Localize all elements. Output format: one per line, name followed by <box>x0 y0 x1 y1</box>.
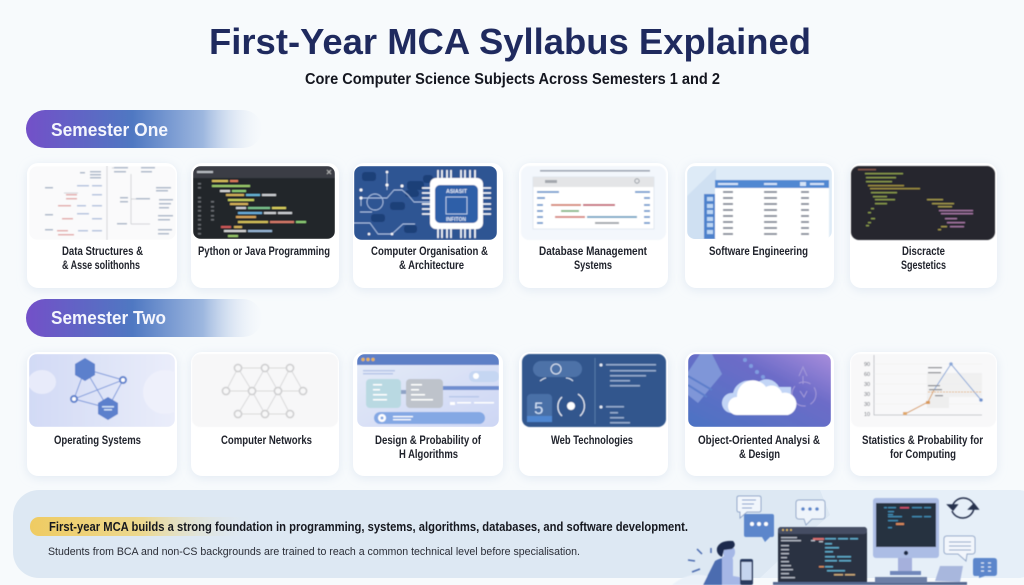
panel: object-oriented analysis card <box>685 352 834 476</box>
chart: line chart: 30 <box>864 402 870 408</box>
label: Discracte <box>902 246 945 258</box>
panel: design and algorithms card <box>353 352 503 476</box>
panel: computer networks card <box>191 352 339 476</box>
thumbnail: network mesh <box>192 354 338 427</box>
label: Computer Networks <box>221 435 312 447</box>
panel: discrete card: Sgestetics <box>901 260 946 272</box>
thumbnail: data table <box>687 166 832 240</box>
chart: line chart: 30 <box>864 382 870 388</box>
label: Object-Oriented Analysi & <box>698 435 820 447</box>
panel: data structures card <box>27 163 177 288</box>
thumbnail: cpu chip: INFITON <box>446 217 466 223</box>
chart: line chart: 60 <box>864 372 870 378</box>
thumbnail: dark code <box>851 166 995 240</box>
panel: python or java card <box>191 163 339 288</box>
thumbnail: tree diagram <box>44 166 174 240</box>
icon: blue list bubble <box>973 558 997 578</box>
panel: object-oriented analysis card: & Design <box>739 449 780 461</box>
icon: note bubble <box>944 536 975 561</box>
heading: semester one: Semester One <box>51 119 168 140</box>
chart: line chart: 30 <box>864 392 870 398</box>
panel: summary banner <box>13 490 1024 578</box>
panel: design and algorithms card: H Algorithms <box>399 449 458 461</box>
chart: line chart: 90 <box>864 362 870 368</box>
icon: laptop code screen <box>778 527 867 585</box>
panel: statistics card: for Computing <box>890 449 956 461</box>
title: First-Year MCA Syllabus Explained <box>209 21 811 62</box>
thumbnail: sql query window <box>521 166 666 240</box>
label: Python or Java Programming <box>198 246 330 258</box>
label: Operating Systems <box>54 435 141 447</box>
thumbnail: process graph <box>28 354 187 427</box>
label: Database Management <box>539 246 647 258</box>
label: Computer Organisation & <box>371 246 488 258</box>
panel: statistics card <box>850 352 997 476</box>
heading: semester two: Semester Two <box>51 307 166 328</box>
highlight <box>30 517 255 536</box>
icon: person with phone <box>672 541 753 585</box>
subtitle: Core Computer Science Subjects Across Semesters 1 and 2 <box>305 71 720 88</box>
icon: small laptop <box>935 566 963 582</box>
label: Web Technologies <box>551 435 633 447</box>
panel: web technologies card <box>519 352 668 476</box>
illustration: developer workspace <box>672 496 997 585</box>
thumbnail: web dashboard: 5 <box>534 399 543 418</box>
panel: discrete card <box>850 163 997 288</box>
thumbnail: cpu chip: ASIASIT <box>446 189 467 195</box>
chart: line chart <box>851 354 996 427</box>
panel: database management card <box>519 163 668 288</box>
desk <box>773 582 967 585</box>
thumbnail: cloud illustration <box>688 354 831 427</box>
panel: database management card: Systems <box>574 260 612 272</box>
icon: white chat bubble <box>796 500 825 525</box>
heading: semester two <box>26 299 262 337</box>
label: Data Structures & <box>62 246 143 258</box>
key message: First-year MCA builds a strong foundation in programming, systems, algorithms, databases, and software development. <box>49 519 688 534</box>
thumbnail: web dashboard <box>522 354 666 427</box>
panel: computer organisation card <box>353 163 503 288</box>
chart: line chart: 10 <box>864 412 870 418</box>
icon: blue chat bubble <box>744 514 774 542</box>
icon: white note bubble <box>737 496 761 518</box>
thumbnail: code editor <box>193 166 335 239</box>
label: Software Engineering <box>709 246 808 258</box>
heading: semester one <box>26 110 262 148</box>
supporting text: Students from BCA and non-CS backgrounds are trained to reach a common technical level before specialisation. <box>48 546 580 558</box>
panel: computer organisation card: & Architecture <box>399 260 464 272</box>
icon: refresh arrows <box>948 498 978 518</box>
thumbnail: cpu chip <box>354 166 497 240</box>
panel: data structures card: & Asse solithonhs <box>62 260 140 272</box>
panel: software engineering card <box>685 163 834 288</box>
label: Design & Probability of <box>375 435 481 447</box>
thumbnail: browser flow ui <box>357 354 499 427</box>
icon: desktop monitor <box>873 498 939 575</box>
panel: operating systems card <box>27 352 187 476</box>
label: Statistics & Probability for <box>862 435 983 447</box>
